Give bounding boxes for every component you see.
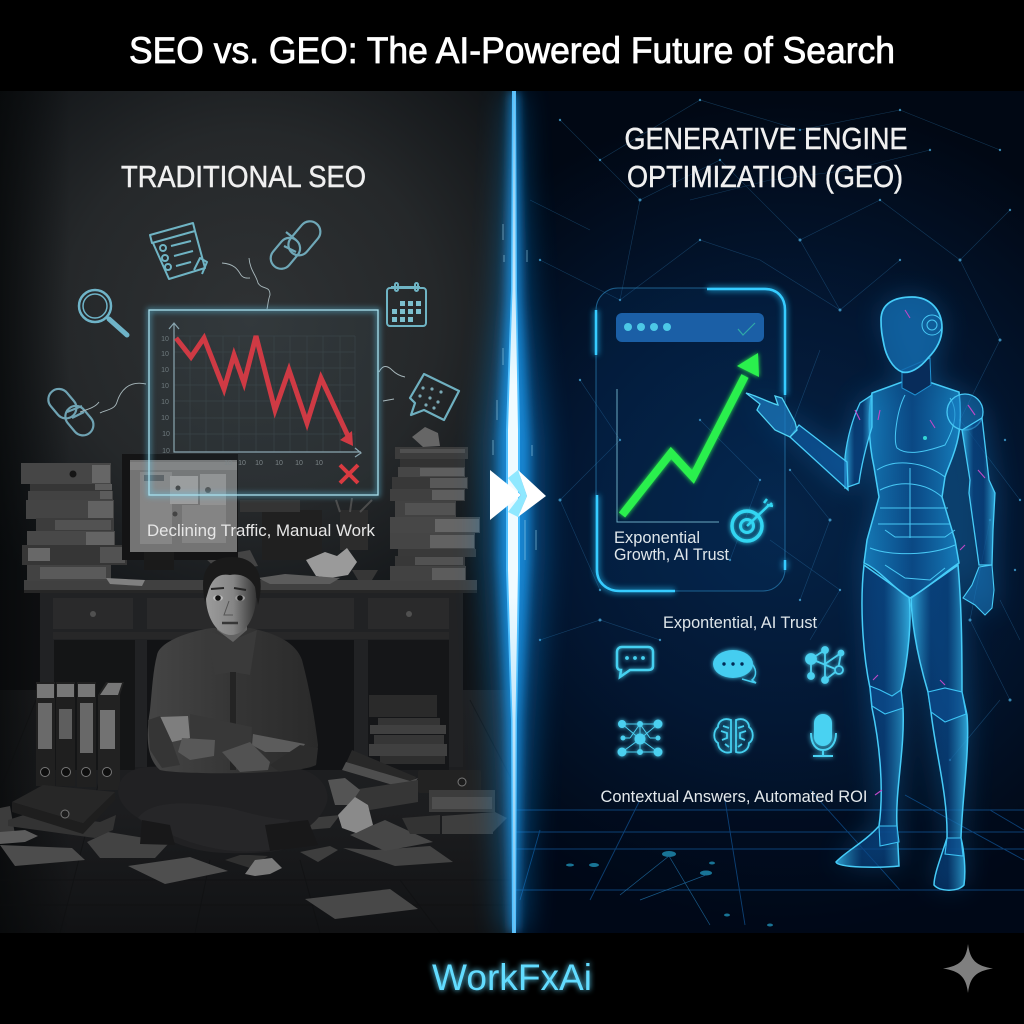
robot pointing hand	[746, 393, 797, 437]
x axis tick labels: 10	[238, 460, 246, 467]
icon row 2: brain	[714, 719, 753, 753]
y axis tick labels: 10	[161, 367, 169, 374]
robot shoulder right	[947, 394, 983, 430]
title: SEO vs. GEO: The AI-Powered Future of Search	[129, 30, 895, 71]
x axis tick labels: 10	[295, 460, 303, 467]
connector squiggles	[80, 258, 405, 413]
scattered papers	[0, 806, 453, 919]
monitor	[122, 454, 238, 570]
dashboard header bar	[616, 313, 764, 342]
panel: generative engine optimization scene	[512, 91, 1024, 933]
icon: calendar	[387, 283, 426, 326]
y axis tick labels: 10	[161, 383, 169, 390]
icon: target with arrow	[732, 499, 773, 541]
robot right hand	[963, 565, 994, 615]
icon row 1: filled speech bubbles	[713, 650, 756, 683]
robot right arm	[962, 418, 995, 565]
panel caption: Exponential	[614, 528, 700, 547]
man shoes	[140, 820, 318, 851]
caption: expontential AI trust: Expontential, AI Trust	[663, 613, 817, 632]
robot glow	[746, 297, 995, 885]
heading: generative engine optimization: OPTIMIZATION (GEO)	[627, 159, 903, 194]
y axis tick labels: 10	[161, 336, 169, 343]
heading: generative engine optimization	[624, 121, 908, 194]
heading: traditional SEO: TRADITIONAL SEO	[121, 159, 366, 194]
y axis tick labels: 10	[161, 399, 169, 406]
green growth arrow	[622, 353, 759, 515]
robot torso plating	[870, 395, 955, 580]
icon: fragmented speech bubble	[410, 374, 459, 420]
x axis tick labels: 10	[224, 460, 232, 467]
icon row 2: microphone	[811, 714, 836, 756]
WorkFxAi logo: WorkFxAi	[432, 957, 592, 998]
title bar	[0, 0, 1024, 91]
y axis tick labels: 10	[161, 351, 169, 358]
x axis tick labels: 10	[315, 460, 323, 467]
robot pointing forearm	[790, 425, 848, 490]
x axis tick labels: 10	[255, 460, 263, 467]
stack of books, right	[390, 427, 480, 581]
y axis tick labels: 10	[162, 431, 170, 438]
robot knee and ankle joints	[870, 686, 966, 856]
illustration: worried man sitting with book	[134, 558, 318, 853]
chevron arrow	[490, 470, 546, 520]
glowing center divider	[483, 91, 545, 933]
y axis tick labels	[161, 336, 170, 455]
sparkle star	[943, 944, 993, 993]
man legs	[134, 766, 318, 853]
heading: generative engine optimization: GENERATIVE ENGINE	[624, 121, 908, 156]
x axis tick labels: 10	[275, 460, 283, 467]
chart panel: declining traffic	[149, 310, 378, 495]
robot head	[881, 297, 942, 372]
robot ear sensor	[922, 315, 942, 335]
man torso	[148, 628, 318, 773]
panel caption: Growth, AI Trust	[614, 545, 729, 564]
icon row 2: neural mesh	[618, 720, 662, 756]
icon: broken chain left	[47, 388, 94, 436]
x axis tick labels	[225, 460, 323, 465]
icon: magnifier	[79, 290, 127, 335]
growth chart axes	[617, 389, 719, 522]
books and binders on floor	[0, 695, 507, 876]
robot right leg	[911, 565, 968, 890]
red cross	[340, 465, 358, 483]
stack of binders and books, left	[21, 463, 127, 581]
illustration: holographic humanoid robot	[746, 297, 995, 890]
icon: checklist	[150, 223, 207, 279]
desk clutter	[106, 498, 378, 586]
network constellation background	[530, 100, 1020, 760]
icon row 1: node network	[806, 647, 844, 683]
dashboard panel	[596, 288, 785, 591]
network nodes	[539, 99, 1021, 761]
icon: broken chain top	[270, 220, 322, 270]
robot torso	[864, 382, 960, 598]
robot pointing upper arm	[845, 395, 872, 488]
caption: declining traffic: Declining Traffic, Manual Work	[147, 521, 375, 540]
robot left leg	[836, 565, 910, 867]
footer bar	[0, 933, 1024, 1024]
man neck and head	[217, 626, 247, 642]
declining red line	[176, 336, 353, 446]
y axis tick labels: 10	[161, 415, 169, 422]
panel: traditional SEO scene	[0, 91, 512, 933]
robot magenta circuit accents	[855, 310, 985, 795]
chart axes	[169, 323, 361, 457]
man eyes and mouth	[211, 588, 246, 623]
panel caption	[614, 528, 729, 564]
icon row 1: chat bubble outline	[617, 647, 653, 677]
y axis tick labels: 10	[162, 448, 170, 455]
floor perspective grid	[512, 790, 1024, 925]
caption: contextual answers: Contextual Answers, Automated ROI	[600, 787, 868, 806]
robot neck	[902, 358, 931, 395]
floor nodes	[566, 851, 773, 926]
open book and hands	[148, 714, 318, 772]
desk	[24, 580, 477, 770]
binders on floor	[36, 682, 124, 790]
